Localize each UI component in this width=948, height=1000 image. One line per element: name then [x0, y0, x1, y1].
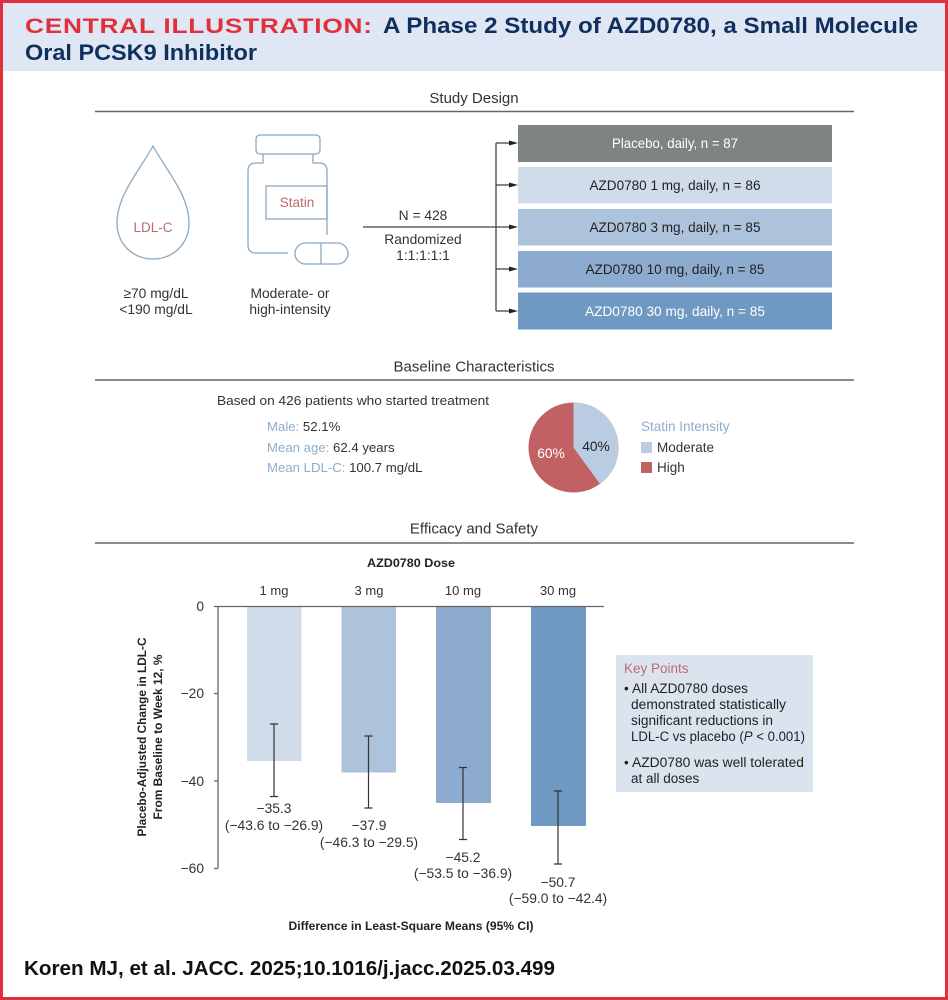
axis tick labels: −40	[181, 774, 204, 789]
callout: key points: LDL-C vs placebo (P < 0.001)	[631, 729, 805, 744]
legend: statin intensity	[641, 419, 730, 475]
axes	[214, 606, 604, 868]
legend: statin intensity: High	[657, 460, 685, 475]
panel: baseline characteristics	[217, 393, 730, 492]
bar chart: LDL-C change by dose	[137, 556, 607, 933]
callout: key points: demonstrated statistically	[631, 697, 786, 712]
value labels: −45.2	[446, 850, 480, 865]
icon: statin bottle and pill	[248, 135, 348, 264]
value labels: −35.3	[257, 801, 292, 816]
axis tick labels: −60	[181, 861, 204, 876]
icon: statin bottle and pill: Statin	[280, 195, 314, 210]
text: LDL-C range: <190 mg/dL	[119, 302, 193, 317]
value labels: (−53.5 to −36.9)	[414, 866, 512, 881]
dose labels	[260, 583, 576, 598]
bars	[247, 606, 586, 826]
axis tick labels: −20	[181, 686, 204, 701]
arm: 30 mg: AZD0780 30 mg, daily, n = 85	[585, 304, 765, 319]
value labels: (−59.0 to −42.4)	[509, 891, 607, 906]
pie chart: statin intensity: 40%	[582, 439, 610, 454]
callout: key points	[616, 655, 813, 792]
dose labels: 3 mg	[355, 583, 383, 598]
x axis title: Difference in Least-Square Means (95% CI)	[288, 921, 534, 933]
callout: key points: Key Points	[624, 661, 689, 676]
text: baseline stats	[217, 393, 489, 475]
randomization label	[384, 208, 462, 263]
pie chart: statin intensity: 60%	[537, 446, 565, 461]
callout: key points: AZD0780 was well tolerated	[632, 755, 804, 770]
arm: 3 mg	[518, 209, 832, 246]
legend: statin intensity: Statin Intensity	[641, 419, 730, 434]
error bars	[270, 724, 562, 864]
text: baseline stats: Mean age: 62.4 years	[267, 440, 395, 455]
value labels: −50.7	[541, 875, 575, 890]
arm: 1 mg: AZD0780 1 mg, daily, n = 86	[590, 178, 761, 193]
callout: key points: at all doses	[631, 771, 700, 786]
header band	[3, 3, 945, 71]
heading: study design: Study Design	[429, 90, 519, 107]
callout: key points: All AZD0780 doses	[632, 681, 748, 696]
arm: placebo: Placebo, daily, n = 87	[612, 136, 738, 151]
value labels: (−43.6 to −26.9)	[225, 818, 323, 833]
y axis title	[137, 638, 165, 836]
value labels: (−46.3 to −29.5)	[320, 835, 418, 850]
text: LDL-C range	[119, 286, 193, 317]
arrows: randomization bracket	[363, 140, 518, 314]
title	[25, 13, 918, 65]
callout: key points: •	[624, 681, 629, 696]
text: statin intensity	[249, 286, 331, 317]
text: baseline stats: Male: 52.1%	[267, 419, 341, 434]
y axis title: From Baseline to Week 12, %	[153, 655, 165, 819]
callout: key points: significant reductions in	[631, 713, 773, 728]
text: statin intensity: high-intensity	[249, 302, 331, 317]
text: baseline stats: Based on 426 patients who started treatment	[217, 393, 489, 408]
dose labels: 10 mg	[445, 583, 481, 598]
dose labels: 30 mg	[540, 583, 576, 598]
value labels: −37.9	[352, 818, 387, 833]
title: A Phase 2 Study of AZD0780, a Small Molecule	[383, 13, 918, 38]
chart title: AZD0780 Dose	[367, 556, 455, 570]
arm: 1 mg	[518, 167, 832, 204]
arm: placebo	[518, 125, 832, 162]
dose labels: 1 mg	[260, 583, 288, 598]
callout: key points: •	[624, 755, 629, 770]
arm: 10 mg: AZD0780 10 mg, daily, n = 85	[586, 262, 765, 277]
randomization label: Randomized	[384, 232, 462, 247]
randomization label: N = 428	[399, 208, 448, 223]
text: LDL-C range: ≥70 mg/dL	[123, 286, 189, 301]
arm: 10 mg	[518, 251, 832, 288]
title: Oral PCSK9 Inhibitor	[25, 40, 257, 65]
panel: study design	[117, 125, 832, 330]
text: baseline stats: Mean LDL-C: 100.7 mg/dL	[267, 460, 422, 475]
randomization label: 1:1:1:1:1	[396, 248, 450, 263]
axis tick labels	[181, 599, 204, 876]
arm: 3 mg: AZD0780 3 mg, daily, n = 85	[590, 220, 761, 235]
y axis title: Placebo-Adjusted Change in LDL-C	[137, 638, 149, 836]
legend: statin intensity: Moderate	[657, 440, 714, 455]
text: statin intensity: Moderate- or	[251, 286, 330, 301]
heading: baseline characteristics: Baseline Characteristics	[394, 358, 554, 376]
pie chart: statin intensity	[528, 402, 618, 492]
icon: LDL-C drop: LDL-C	[133, 220, 173, 235]
citation: Koren MJ, et al. JACC. 2025;10.1016/j.jacc.2025.03.499	[24, 958, 555, 980]
icon: LDL-C drop	[117, 146, 189, 259]
title: CENTRAL ILLUSTRATION:	[25, 14, 372, 38]
axis tick labels: 0	[196, 599, 204, 614]
value labels	[225, 801, 607, 906]
arm: 30 mg	[518, 292, 832, 330]
heading: efficacy and safety: Efficacy and Safety	[410, 520, 539, 538]
